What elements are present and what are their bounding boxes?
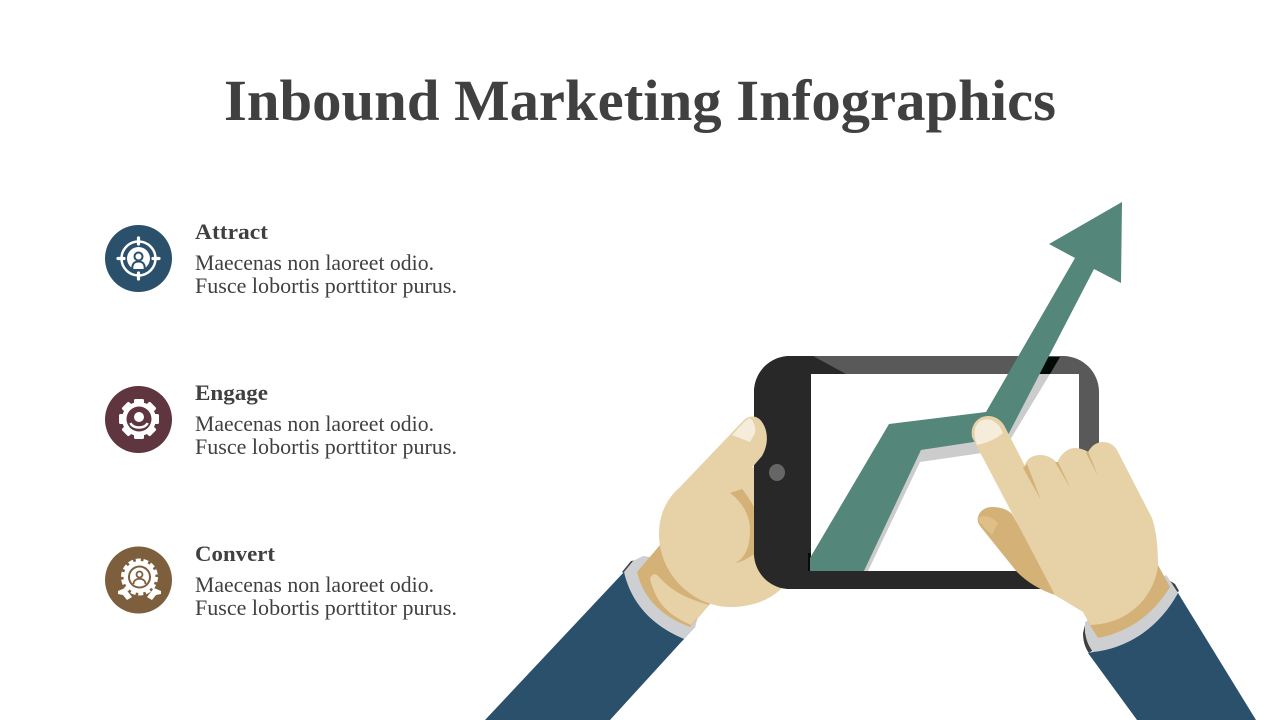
heading: convert: Convert — [195, 541, 276, 566]
icon: target person — [105, 225, 172, 292]
heading: attract: Attract — [195, 219, 269, 244]
text: attract description: Fusce lobortis porttitor purus. — [195, 273, 457, 298]
text: convert description — [195, 572, 457, 620]
finger creases — [1023, 451, 1098, 500]
icon: gear person — [105, 386, 172, 453]
text: engage description: Maecenas non laoreet odio. — [195, 411, 434, 436]
left hand: wrist and palm — [637, 465, 782, 627]
nail — [975, 419, 1003, 445]
arm: right sleeve and cuff — [1083, 575, 1256, 720]
right thumb — [978, 507, 1060, 598]
illustration: hands holding phone with growth arrow — [485, 202, 1256, 720]
title: Inbound Marketing Infographics — [224, 68, 1056, 133]
text: convert description: Maecenas non laoreet odio. — [195, 572, 434, 597]
text: convert description: Fusce lobortis porttitor purus. — [195, 595, 457, 620]
phone — [754, 356, 1099, 589]
left thumb — [680, 417, 767, 520]
text: engage description — [195, 411, 457, 459]
heading: engage: Engage — [195, 380, 268, 405]
growth arrow — [810, 202, 1122, 571]
text: attract description: Maecenas non laoreet odio. — [195, 250, 434, 275]
panel: attract — [105, 219, 457, 298]
right hand — [972, 416, 1170, 638]
panel: convert — [105, 541, 457, 620]
text: engage description: Fusce lobortis porttitor purus. — [195, 434, 457, 459]
arrow shadow and bezel shade — [864, 357, 1060, 571]
phone button — [769, 464, 785, 481]
icon: award person — [105, 546, 172, 614]
arm: left sleeve and cuff — [485, 556, 698, 720]
panel: engage — [105, 380, 457, 459]
text: attract description — [195, 250, 457, 298]
